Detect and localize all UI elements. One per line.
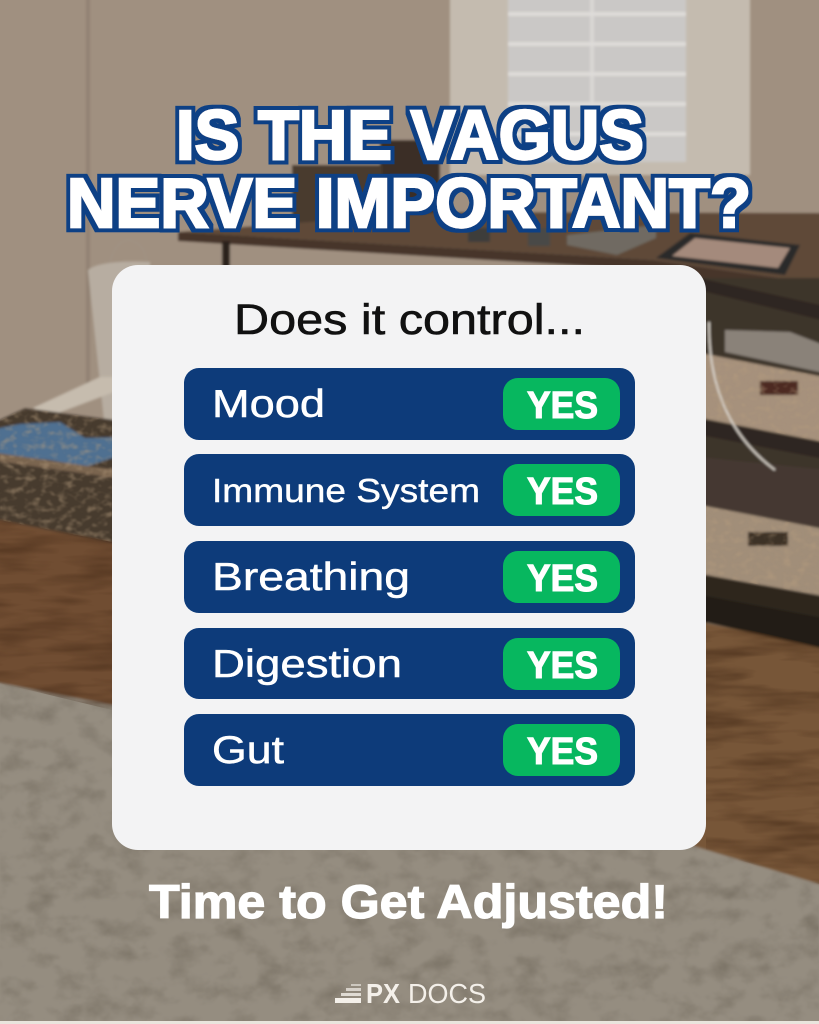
side basket with clothes [0,408,130,546]
row: mood [184,368,635,440]
call to action: Time to Get Adjusted! [149,875,668,928]
laundry basket [88,262,150,420]
row: immune system [184,454,635,526]
row: breathing [184,541,635,613]
row: breathing: YES [527,558,598,600]
title [67,96,751,242]
shelves [690,278,819,623]
title: NERVE IMPORTANT? [67,164,751,242]
row: digestion: Digestion [212,643,402,686]
icon: stepped bars [335,984,361,1003]
row: breathing: Breathing [212,556,410,599]
row: digestion: YES [527,645,598,687]
panel: does it control checklist [112,265,706,850]
row: gut: Gut [212,729,284,772]
row: gut [184,714,635,786]
row: immune system: Immune System [212,472,480,509]
right floor [690,620,819,887]
row: mood: YES [527,385,598,427]
desk [178,212,819,285]
tablet and devices on desk [656,233,800,275]
row: immune system: YES [527,471,598,513]
left floor [0,512,130,716]
row: mood: Mood [212,383,325,426]
row: gut: YES [527,731,598,773]
logo: PX Docs: PX [366,978,400,1009]
panel heading: Does it control... [234,296,585,344]
logo: PX Docs [335,978,486,1009]
panel background card [112,265,706,850]
title: IS THE VAGUS [176,96,644,174]
logo: PX Docs: DOCS [408,978,486,1009]
row: digestion [184,628,635,699]
rug [0,681,819,1024]
